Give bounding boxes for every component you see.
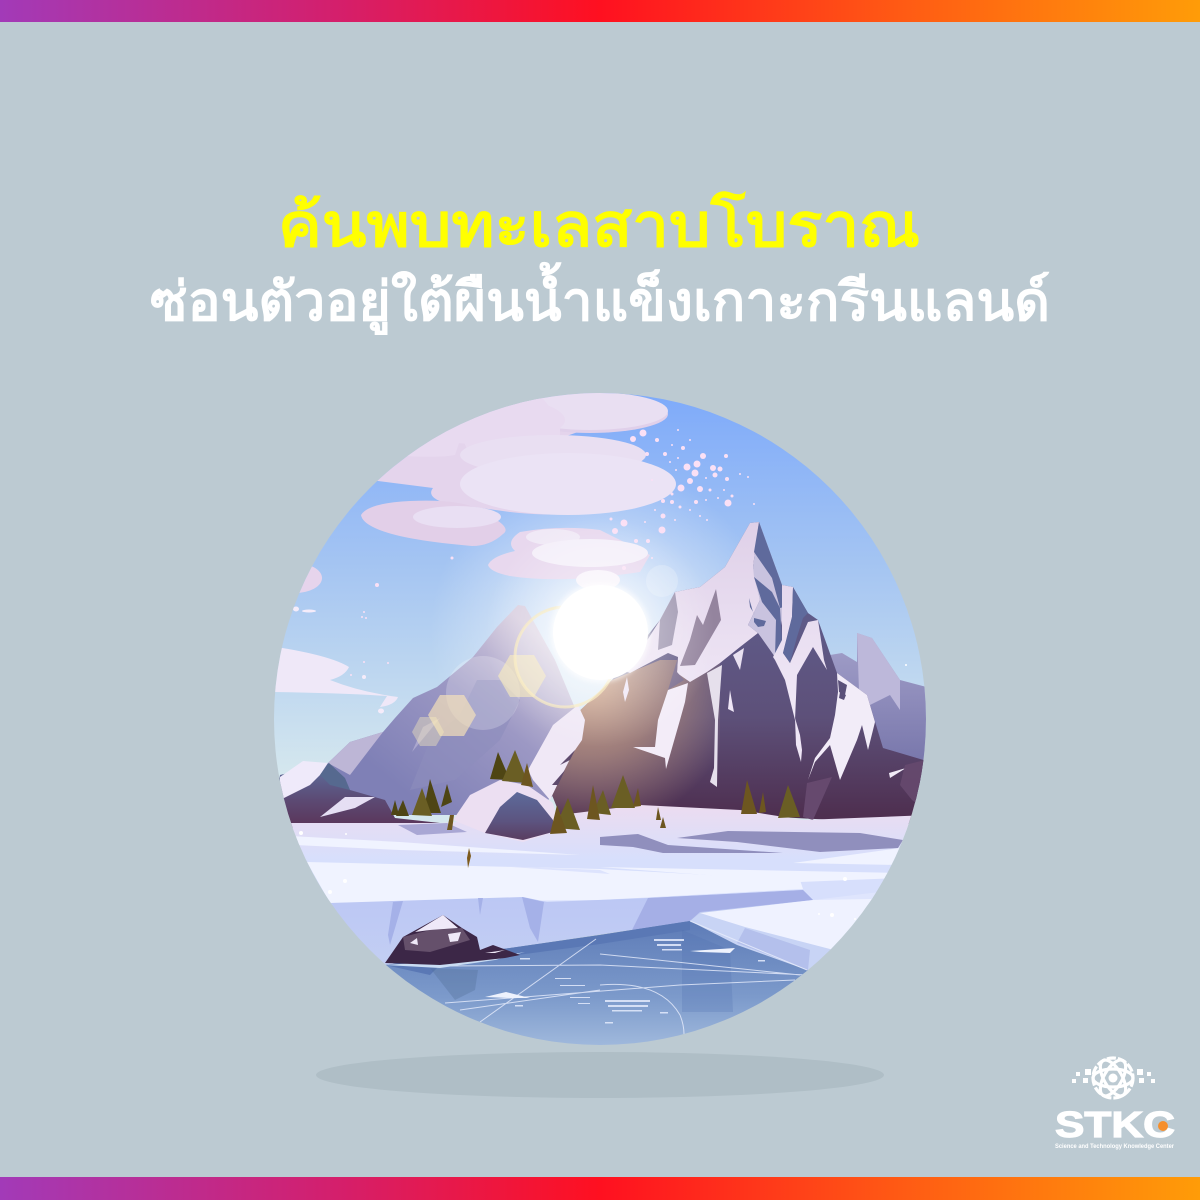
foreground left snow peak [528,705,585,800]
logo: tagline: Science and Technology Knowledge Center [1055,1144,1175,1150]
left mountain [328,605,574,815]
bottom gradient bar [0,1177,1200,1200]
snow particles [350,429,755,676]
sun glow on sky [455,496,730,710]
sun glow over mountains [512,560,702,734]
STKC logo [1055,1056,1175,1150]
main mountain [550,522,930,825]
logo: atom mark [1093,1056,1133,1100]
circular mountain illustration [268,390,930,1050]
right ice shelf [690,892,876,970]
mound with rock [453,780,560,842]
sparkles [299,664,907,920]
left foreground rocks [275,761,440,828]
subheading: ซ่อนตัวอยู่ใต้ผืนน้ำแข็งเกาะกรีนแลนด์ [150,262,1050,335]
lens flares [412,565,678,746]
logo: pixel squares [1072,1069,1155,1083]
back right mountain [830,633,930,800]
heading: ค้นพบทะเลสาบโบราณ [278,190,920,259]
ice cliff [330,890,813,965]
pine trees [391,750,800,868]
sky [270,390,930,840]
ground shadow ellipse [316,1052,884,1098]
water-side rock [385,915,525,968]
sun [550,582,650,682]
frozen lake [386,920,808,1045]
logo: wordmark: STKC [1055,1104,1175,1145]
snow ground [270,805,930,905]
logo: orange dot [1158,1121,1168,1131]
clouds [268,390,676,714]
top gradient bar [0,0,1200,22]
